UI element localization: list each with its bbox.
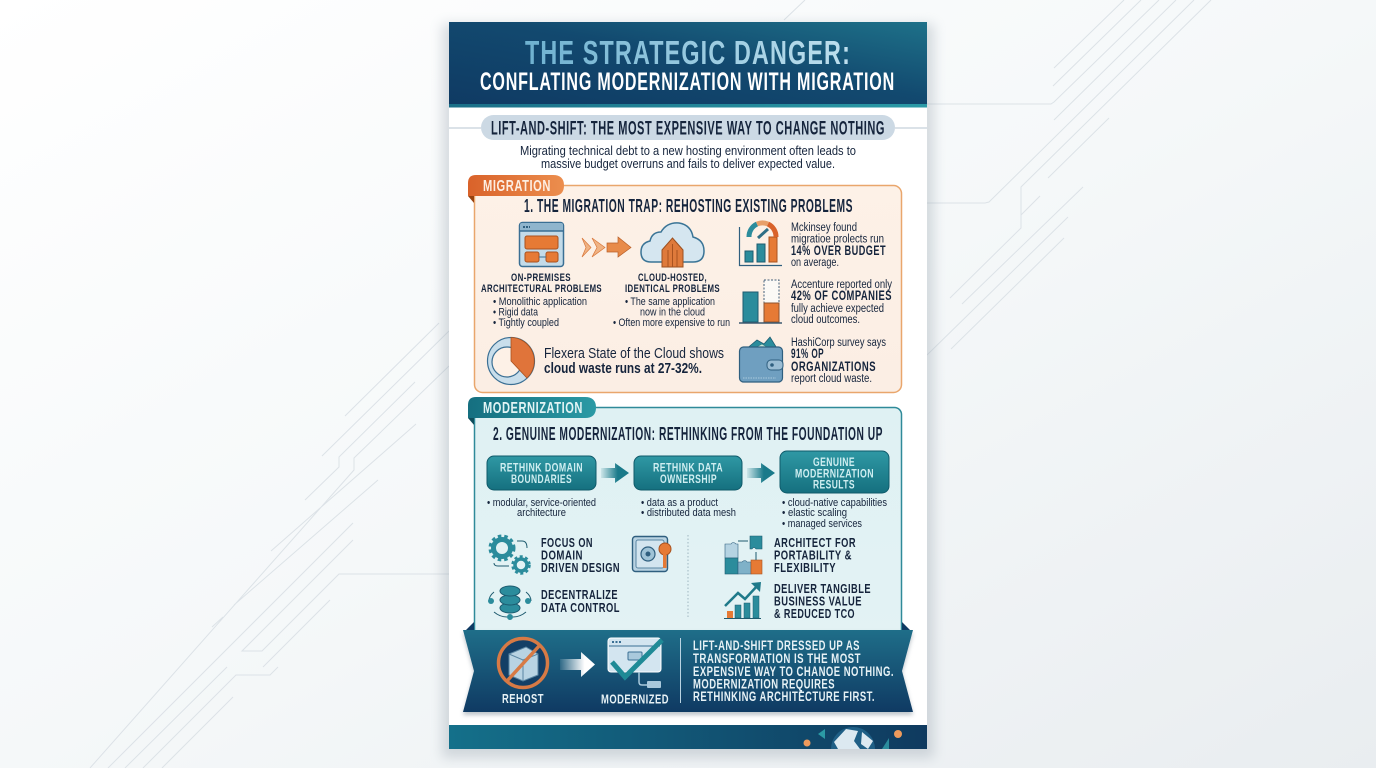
text: on-premises problems: • Monolithic application <box>493 296 587 308</box>
step: genuine modernization results: GENUINE <box>813 457 855 469</box>
text: cloud-hosted problems <box>613 272 730 329</box>
step: rethink domain boundaries: BOUNDARIES <box>511 474 572 486</box>
icon: partial bar chart <box>739 280 782 323</box>
icon: waste donut <box>488 338 534 384</box>
text: cloud-hosted problems: CLOUD-HOSTED, <box>638 272 707 284</box>
infographic card <box>449 22 927 768</box>
bullets: step details: • cloud-native capabilities <box>782 497 887 509</box>
tab: migration: MIGRATION <box>483 178 551 195</box>
icon: modernized browser <box>608 638 662 688</box>
text: decentralize data control: DECENTRALIZE <box>541 587 618 602</box>
header banner <box>449 22 927 108</box>
ribbon: conclusion <box>463 622 913 715</box>
title line 1: THE STRATEGIC DANGER: <box>525 34 851 71</box>
bullets: step details: architecture <box>517 507 566 519</box>
intro text: Migrating technical debt to a new hosting environment often leads to <box>520 143 856 158</box>
text: business value <box>774 581 871 621</box>
step: genuine modernization results <box>780 451 889 493</box>
step: rethink domain boundaries <box>487 456 596 490</box>
text: portability: FLEXIBILITY <box>774 560 836 575</box>
text: cloud-hosted problems: now in the cloud <box>640 306 705 318</box>
text: domain driven design: FOCUS ON <box>541 535 593 550</box>
text: conclusion <box>693 638 894 704</box>
stat: mckinsey: Mckinsey found <box>791 222 857 234</box>
arrow: step one to two <box>601 463 629 483</box>
tab: modernization <box>468 397 596 418</box>
icon: puzzle <box>725 536 762 574</box>
panel: modernization <box>468 397 902 640</box>
text: portability <box>774 535 856 575</box>
panel: migration <box>468 175 902 392</box>
text: business value: BUSINESS VALUE <box>774 594 862 608</box>
stat: hashicorp: report cloud waste. <box>791 373 872 385</box>
step: rethink data ownership <box>634 456 742 490</box>
text: conclusion: EXPENSIVE WAY TO CHANOE NOTHING. <box>693 664 894 679</box>
label: modernized: MODERNIZED <box>601 692 669 706</box>
text: domain driven design: DRIVEN DESIGN <box>541 560 620 575</box>
bullets: step details: • data as a product <box>641 497 718 509</box>
bullets: step details: • elastic scaling <box>782 507 847 519</box>
stat: hashicorp: ORGANIZATIONS <box>791 359 876 374</box>
stat: hashicorp: 91% OP <box>791 346 824 361</box>
title line 2: CONFLATING MODERNIZATION WITH MIGRATION <box>480 68 895 96</box>
stat: flexera <box>544 345 724 377</box>
text: on-premises problems: • Rigid data <box>493 306 539 318</box>
footer bar <box>449 725 927 749</box>
subtitle pill <box>481 115 895 140</box>
text: on-premises problems: ARCHITECTURAL PROBLEMS <box>481 283 602 295</box>
text: domain driven design <box>541 535 620 575</box>
text: conclusion: RETHINKING ARCHITECTURE FIRST. <box>693 689 875 704</box>
stat: accenture <box>791 279 892 326</box>
stat: accenture: cloud outcomes. <box>791 314 860 326</box>
subtitle pill: LIFT-AND-SHIFT: THE MOST EXPENSIVE WAY TO CHANGE NOTHING <box>491 118 885 140</box>
icon: wallet <box>740 337 783 382</box>
text: conclusion: TRANSFORMATION IS THE MOST <box>693 651 861 666</box>
text: business value: & REDUCED TCO <box>774 606 855 621</box>
stat: mckinsey <box>791 222 886 269</box>
bullets: step details: • distributed data mesh <box>641 507 736 519</box>
step: genuine modernization results: MODERNIZATION <box>795 468 874 480</box>
stat: flexera: cloud waste runs at 27-32%. <box>544 360 702 377</box>
icon: globe and nodes <box>804 727 902 749</box>
icon: no rehost <box>498 638 548 688</box>
step: genuine modernization results: RESULTS <box>813 480 855 492</box>
text: portability: PORTABILITY & <box>774 548 852 562</box>
step: rethink domain boundaries: RETHINK DOMAIN <box>500 462 583 474</box>
intro text: massive budget overruns and fails to deliver expected value. <box>541 156 835 171</box>
stat: accenture: 42% OF COMPANIES <box>791 288 892 303</box>
bullets: step details <box>487 497 887 530</box>
heading: migration trap: 1. THE MIGRATION TRAP: REHOSTING EXISTING PROBLEMS <box>524 195 853 216</box>
text: cloud-hosted problems: IDENTICAL PROBLEMS <box>625 283 720 295</box>
text: conclusion: LIFT-AND-SHIFT DRESSED UP AS <box>693 638 860 653</box>
icon: safe and key <box>632 536 671 572</box>
stat: mckinsey: 14% OVER BUDGET <box>791 243 886 258</box>
text: conclusion: MODERNIZATION REQUIRES <box>693 676 835 692</box>
stat: flexera: Flexera State of the Cloud shows <box>544 345 724 362</box>
arrow: step two to three <box>747 463 775 483</box>
icon: on-premises browser <box>520 222 564 266</box>
text: decentralize data control <box>541 587 620 615</box>
heading: genuine modernization: 2. GENUINE MODERNIZATION: RETHINKING FROM THE FOUNDATION UP <box>493 423 883 444</box>
arrow: rehost to modernized <box>560 652 595 677</box>
icon: data hub <box>488 586 531 620</box>
icon: cloud with house <box>641 223 704 267</box>
icon: growth chart <box>724 582 761 618</box>
tab: migration <box>468 175 564 196</box>
text: on-premises problems <box>481 272 602 329</box>
stat: mckinsey: migratioe prolects run <box>791 234 884 246</box>
tab: modernization: MODERNIZATION <box>483 400 583 417</box>
text: decentralize data control: DATA CONTROL <box>541 600 620 615</box>
bullets: step details: • managed services <box>782 518 862 530</box>
text: portability: ARCHITECT FOR <box>774 535 856 550</box>
text: cloud-hosted problems: • Often more expensive to run <box>613 317 730 329</box>
stat: mckinsey: on average. <box>791 257 839 269</box>
stat: hashicorp <box>791 337 886 385</box>
bullets: step details: • modular, service-oriented <box>487 497 596 509</box>
label: rehost: REHOST <box>502 691 544 706</box>
stat: accenture: fully achieve expected <box>791 303 884 315</box>
step: rethink data ownership: OWNERSHIP <box>660 474 717 486</box>
text: on-premises problems: • Tightly coupled <box>493 317 559 329</box>
arrow: migration chevrons <box>582 237 631 257</box>
step: rethink data ownership: RETHINK DATA <box>653 462 723 474</box>
text: cloud-hosted problems: • The same application <box>625 296 715 308</box>
text: business value: DELIVER TANGIBLE <box>774 581 871 596</box>
text: domain driven design: DOMAIN <box>541 548 583 562</box>
icon: gauge and bars <box>740 223 782 266</box>
text: on-premises problems: ON-PREMISES <box>511 272 571 284</box>
intro text <box>520 143 856 171</box>
stat: accenture: Accenture reported only <box>791 279 892 291</box>
icon: gears <box>490 536 530 574</box>
stat: hashicorp: HashiCorp survey says <box>791 337 886 349</box>
